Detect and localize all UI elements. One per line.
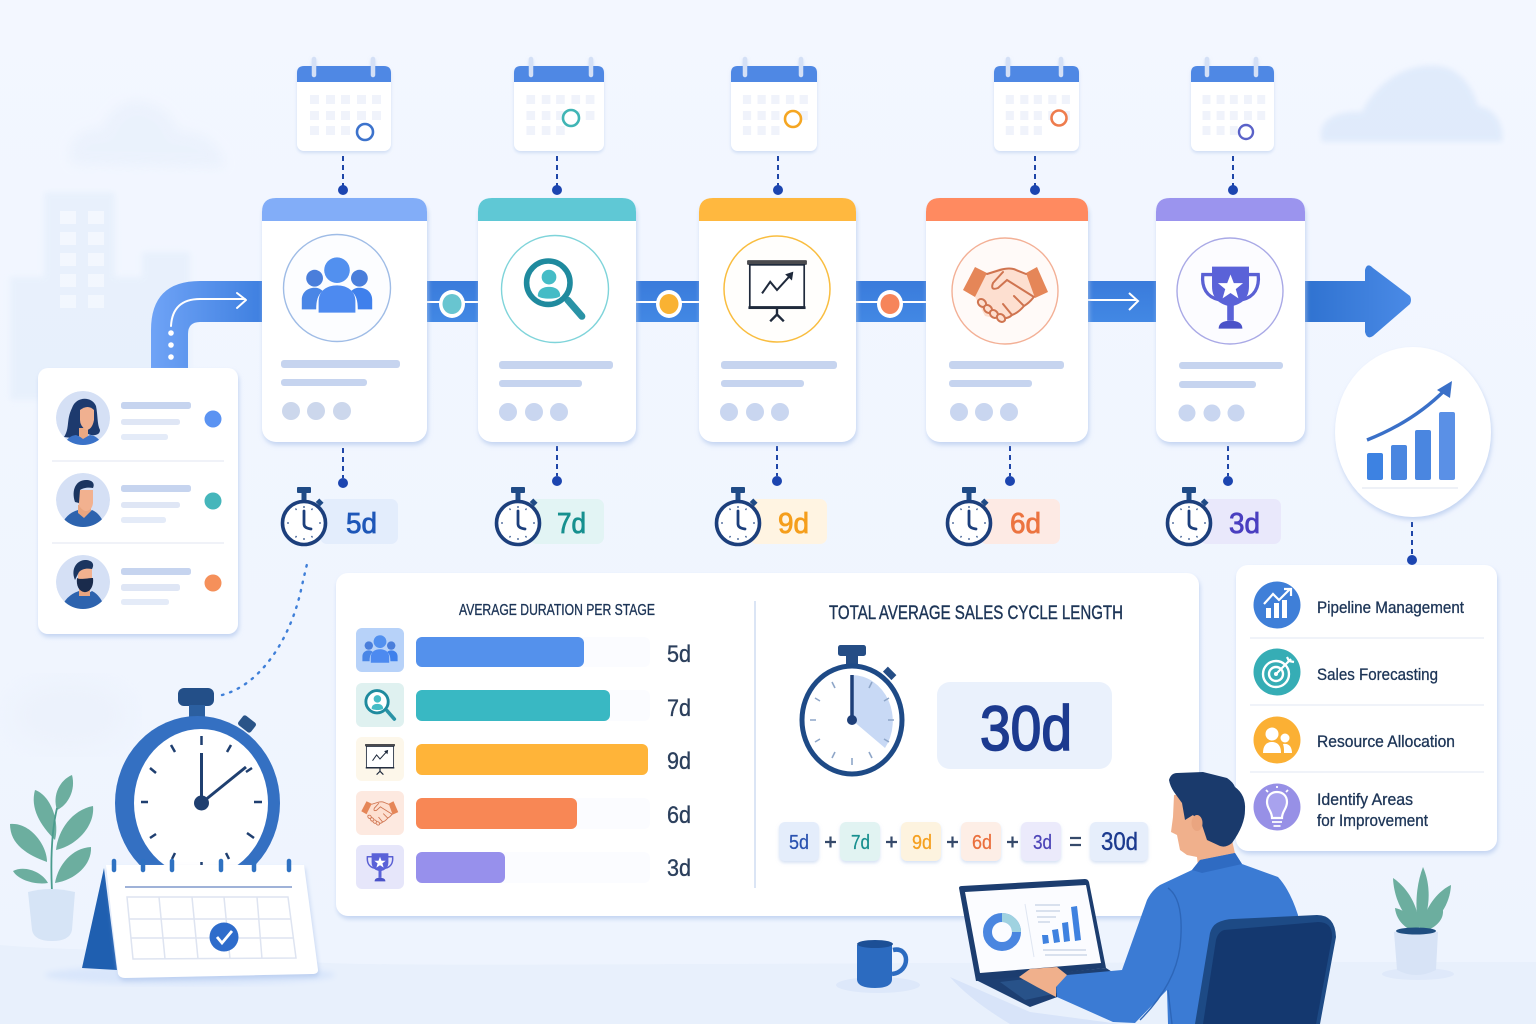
sum equation: 6d [972, 832, 992, 854]
sum equation: 30d [1101, 828, 1138, 856]
bar chart [356, 628, 691, 889]
avatar: man [56, 473, 110, 530]
icon: handshake [963, 267, 1048, 324]
calendar 3 [731, 59, 817, 151]
calendar 2 [514, 59, 604, 151]
icon: trophy [1203, 267, 1258, 329]
duration badge 3: 9d [778, 508, 809, 540]
total badge [937, 682, 1112, 769]
card: stage 1 [262, 198, 427, 442]
end arrow [1304, 265, 1411, 337]
sum equation: 7d [851, 832, 870, 854]
sum equation: 3d [1033, 832, 1052, 854]
chart circle [1335, 347, 1491, 517]
dotted link [222, 560, 308, 695]
connectors [338, 156, 1417, 565]
item: resource allocation [1254, 716, 1455, 764]
background city [10, 192, 190, 400]
large stopwatch [115, 688, 280, 890]
calendar 5 [1191, 59, 1274, 151]
elbow connector [151, 281, 262, 368]
duration badge 5 [1168, 487, 1281, 544]
card: stage 2 [478, 198, 636, 442]
item: sales forecasting [1254, 648, 1438, 696]
chair [1195, 915, 1336, 1024]
item: resource allocation: Resource Allocation [1317, 733, 1455, 751]
item: pipeline management: Pipeline Management [1317, 599, 1464, 617]
background cloud left [70, 100, 225, 168]
total title: TOTAL AVERAGE SALES CYCLE LENGTH [829, 603, 1123, 624]
item: pipeline management [1254, 582, 1464, 628]
neck and face [1171, 790, 1236, 866]
icon: presentation board [747, 260, 807, 321]
duration badge 2 [496, 487, 604, 544]
icon: magnifier [527, 261, 582, 316]
card: stage 5 [1156, 198, 1305, 442]
desk calendar [45, 861, 335, 985]
item: identify areas [1254, 784, 1428, 830]
bar chart: 9d [667, 748, 691, 775]
bar chart: 3d [667, 855, 691, 882]
chart title: AVERAGE DURATION PER STAGE [459, 602, 655, 619]
left plant [10, 775, 93, 941]
panel: benefits [1236, 565, 1497, 851]
person at laptop [1019, 772, 1336, 1024]
hair [1169, 772, 1245, 847]
laptop [959, 879, 1117, 1007]
background cloud lower left [10, 680, 130, 750]
panel: team [38, 368, 238, 634]
hand [1019, 967, 1067, 997]
icon: team [302, 257, 372, 313]
item: identify areas: for Improvement [1317, 812, 1428, 830]
calendar 4 [994, 59, 1079, 151]
duration badge 3 [716, 487, 827, 544]
duration badge 1 [282, 487, 398, 544]
total stopwatch [802, 645, 902, 774]
duration badge 2: 7d [557, 508, 586, 540]
avatar: bearded man [56, 555, 110, 612]
duration badge 4 [948, 487, 1060, 544]
total badge: 30d [980, 694, 1072, 764]
bar chart: 5d [667, 641, 691, 668]
bar chart: 6d [667, 802, 691, 829]
shirt [1056, 853, 1298, 1024]
avatar: woman [56, 391, 110, 450]
sum equation: 9d [912, 832, 932, 854]
card: stage 3 [699, 198, 856, 442]
process pipeline [151, 281, 1156, 368]
floor [0, 945, 1536, 1024]
duration badge 4: 6d [1010, 508, 1041, 540]
panel: durations and total [336, 573, 1199, 916]
duration badge 5: 3d [1229, 508, 1260, 540]
ear [1192, 815, 1202, 831]
desk shadow [950, 977, 1120, 1024]
sum equation: 5d [789, 832, 809, 854]
item: sales forecasting: Sales Forecasting [1317, 666, 1438, 684]
card: stage 4 [926, 198, 1088, 442]
right plant [1382, 867, 1454, 980]
item: identify areas: Identify Areas [1317, 791, 1413, 809]
bar chart: 7d [667, 695, 691, 722]
mug [836, 940, 920, 993]
background cloud right [1321, 66, 1503, 142]
calendar 1 [297, 59, 391, 151]
duration badge 1: 5d [346, 508, 377, 540]
sum equation [779, 822, 1148, 861]
